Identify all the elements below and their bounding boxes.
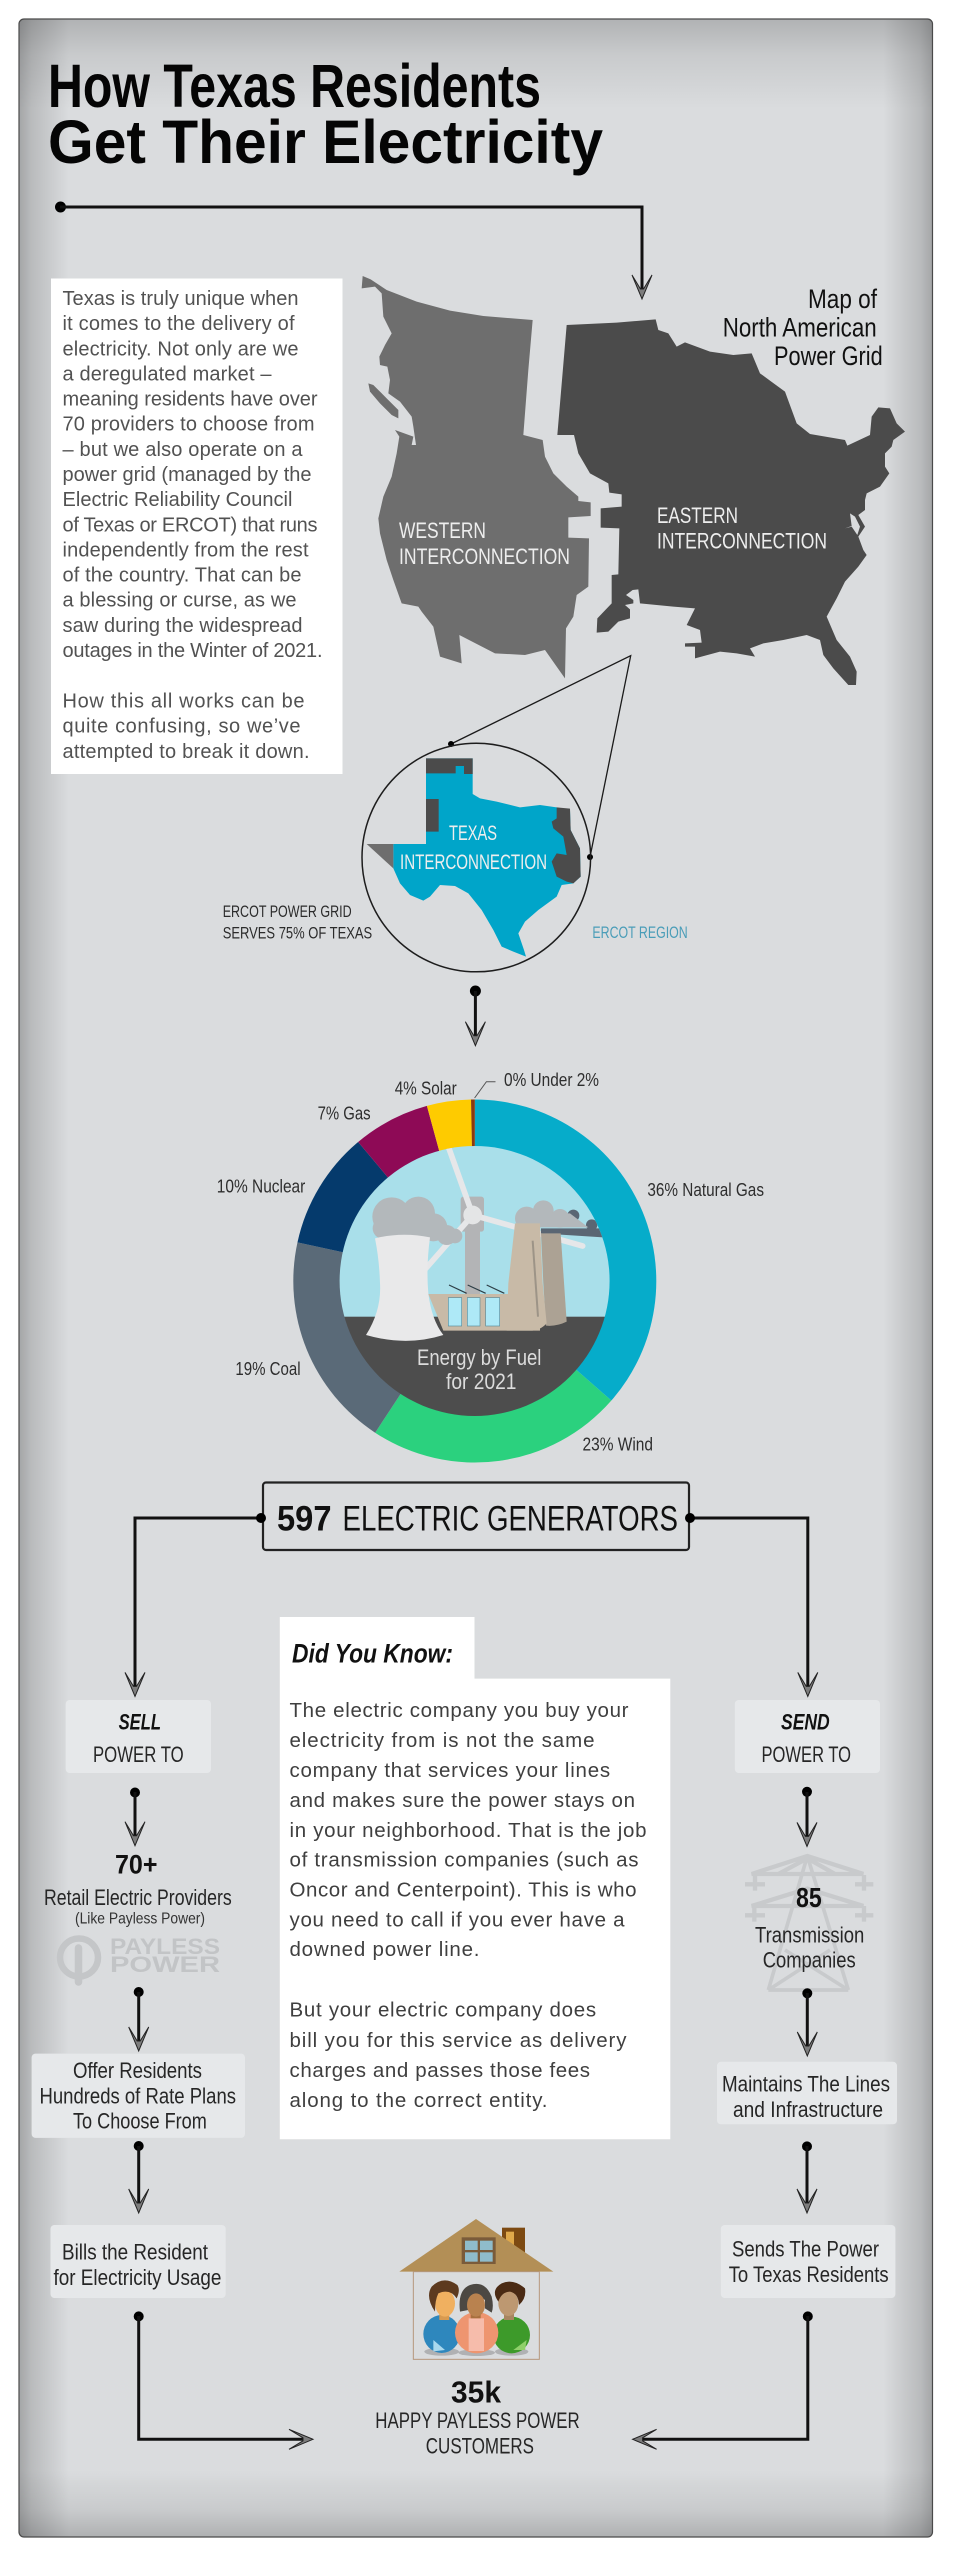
panel: intro text: How this all works can be xyxy=(62,690,304,712)
stat: 85 transmission companies: Companies xyxy=(763,1948,856,1973)
label: ERCOT power grid xyxy=(223,902,372,943)
box: bills the resident: Bills the Resident xyxy=(62,2240,208,2265)
panel: did you know: and makes sure the power stays on xyxy=(290,1789,635,1812)
panel: intro text: independently from the rest xyxy=(62,539,309,561)
icon: transmission tower xyxy=(745,1856,873,1990)
box: rate plans: Offer Residents xyxy=(73,2058,202,2083)
arrow: Texas to donut xyxy=(465,986,485,1046)
panel: did you know: along to the correct entity. xyxy=(290,2089,548,2112)
arrow: send to transmission xyxy=(797,1787,817,1846)
stat: 70+ retail electric providers: (Like Payless Power) xyxy=(75,1910,205,1927)
panel: intro text xyxy=(51,278,342,774)
slice: gas xyxy=(358,1106,475,1281)
panel: did you know: But your electric company does xyxy=(290,1998,596,2021)
map: western interconnection: WESTERN xyxy=(399,518,486,543)
panel: did you know: The electric company you buy your xyxy=(290,1699,629,1722)
map: Texas interconnection circle: TEXAS xyxy=(449,822,497,845)
map: western interconnection xyxy=(362,276,591,678)
donut labels: 10% Nuclear xyxy=(217,1176,305,1196)
box: maintains lines xyxy=(717,2062,897,2124)
panel: did you know: Did You Know: xyxy=(292,1638,453,1668)
logo: payless power: POWER xyxy=(110,1952,220,1977)
box: send power to: POWER TO xyxy=(762,1742,851,1767)
map: eastern interconnection xyxy=(557,319,905,685)
icon: house with family xyxy=(399,2219,553,2359)
box: sell power to: POWER TO xyxy=(93,1742,184,1767)
stat: 35k customers: CUSTOMERS xyxy=(426,2434,534,2459)
arrow: generators to sell xyxy=(125,1513,266,1696)
box: 597 electric generators: ELECTRIC GENERATORS xyxy=(342,1499,678,1538)
panel: did you know: bill you for this service as delivery xyxy=(290,2029,627,2052)
slice: wind xyxy=(375,1281,611,1462)
box: sell power to xyxy=(66,1700,211,1773)
zoom lines: map to Texas xyxy=(448,656,631,860)
map heading: Power Grid xyxy=(774,341,883,371)
box: sell power to: SELL xyxy=(119,1710,161,1735)
title: How Texas Residents xyxy=(48,52,541,120)
box: 597 electric generators: 597 xyxy=(277,1499,332,1538)
arrow: lines to sends xyxy=(797,2141,817,2213)
map heading: Map of xyxy=(808,284,877,314)
box: maintains lines: Maintains The Lines xyxy=(722,2071,890,2096)
map: western interconnection: INTERCONNECTION xyxy=(399,544,570,569)
panel: intro text: Electric Reliability Council xyxy=(62,489,292,511)
title xyxy=(48,52,603,176)
donut labels: 36% Natural Gas xyxy=(647,1180,764,1200)
stat: 70+ retail electric providers: 70+ xyxy=(115,1850,158,1880)
map heading xyxy=(723,284,883,371)
panel: intro text: it comes to the delivery of xyxy=(62,313,295,335)
label: ERCOT power grid: ERCOT POWER GRID xyxy=(223,902,352,921)
panel: did you know: charges and passes those fees xyxy=(290,2059,590,2082)
slice: solar xyxy=(427,1100,475,1281)
stat: 85 transmission companies: 85 xyxy=(796,1882,822,1913)
donut labels: 0% Under 2% xyxy=(504,1070,599,1090)
person: right xyxy=(493,2282,530,2353)
panel: intro text: – but we also operate on a xyxy=(62,439,303,461)
stat: 85 transmission companies xyxy=(755,1882,864,1973)
arrow: generators to send xyxy=(685,1513,818,1696)
map: eastern interconnection: EASTERN xyxy=(657,503,738,528)
donut center caption xyxy=(417,1345,541,1394)
panel: intro text: Texas is truly unique when xyxy=(62,288,298,310)
arrow: sell to retail providers xyxy=(125,1788,145,1846)
person: left xyxy=(423,2280,460,2353)
panel: did you know: electricity from is not the same xyxy=(290,1729,594,1752)
panel: intro text: 70 providers to choose from xyxy=(62,414,314,436)
donut labels xyxy=(217,1070,764,1455)
panel: intro text: a deregulated market – xyxy=(62,363,272,385)
slice: coal xyxy=(293,1242,475,1433)
panel: intro text: saw during the widespread xyxy=(62,615,302,637)
arrow: transmission to lines xyxy=(797,1988,817,2056)
donut labels: 4% Solar xyxy=(395,1079,457,1099)
donut chart: energy by fuel xyxy=(293,1100,656,1462)
label: ERCOT region: ERCOT REGION xyxy=(592,923,688,942)
panel: did you know xyxy=(280,1617,670,2139)
panel: intro text: of Texas or ERCOT) that runs xyxy=(62,514,318,536)
person: center xyxy=(455,2284,498,2353)
panel: intro text: a blessing or curse, as we xyxy=(62,590,296,612)
panel: intro text: electricity. Not only are we xyxy=(62,338,298,360)
box: sends the power: To Texas Residents xyxy=(729,2262,889,2287)
donut labels: 23% Wind xyxy=(582,1435,653,1455)
panel: intro text: power grid (managed by the xyxy=(62,464,312,486)
donut labels: 19% Coal xyxy=(235,1359,301,1379)
donut labels: 7% Gas xyxy=(318,1103,371,1123)
panel: did you know: of transmission companies (such as xyxy=(290,1849,638,1872)
box: bills the resident: for Electricity Usage xyxy=(54,2265,221,2290)
stat: 70+ retail electric providers xyxy=(44,1850,232,1927)
box: sends the power xyxy=(721,2225,895,2298)
box: 597 electric generators xyxy=(263,1482,689,1550)
arrow: title to map xyxy=(55,202,652,299)
box: rate plans xyxy=(32,2054,245,2138)
panel: intro text: attempted to break it down. xyxy=(62,741,310,763)
panel: did you know: downed power line. xyxy=(290,1938,480,1961)
box: sends the power: Sends The Power xyxy=(732,2236,879,2261)
box: maintains lines: and Infrastructure xyxy=(733,2097,883,2122)
panel: did you know: in your neighborhood. That is the job xyxy=(290,1819,646,1842)
panel: intro text: of the country. That can be xyxy=(62,564,302,586)
box: send power to: SEND xyxy=(781,1710,830,1735)
map: eastern interconnection: INTERCONNECTION xyxy=(657,529,827,554)
logo: payless power xyxy=(60,1934,220,1982)
panel: did you know: company that services your lines xyxy=(290,1759,610,1782)
box: send power to xyxy=(735,1700,880,1773)
stat: 70+ retail electric providers: Retail Electric Providers xyxy=(44,1885,232,1910)
center illustration: power plant scene xyxy=(339,1146,611,1417)
box: rate plans: Hundreds of Rate Plans xyxy=(40,2084,236,2109)
arrow: bills to customers xyxy=(134,2311,313,2449)
stat: 35k customers: 35k xyxy=(451,2374,502,2410)
arrow: providers to rate plans xyxy=(129,1987,149,2051)
stat: 85 transmission companies: Transmission xyxy=(755,1922,864,1947)
label: ERCOT power grid: SERVES 75% OF TEXAS xyxy=(223,924,372,943)
donut center caption: for 2021 xyxy=(446,1369,516,1394)
logo: payless power: PAYLESS xyxy=(110,1934,220,1959)
slice: nuclear xyxy=(297,1142,475,1281)
donut center caption: Energy by Fuel xyxy=(417,1345,541,1370)
arrow: sends to customers xyxy=(633,2311,813,2449)
panel: intro text: meaning residents have over xyxy=(62,389,318,411)
title: Get Their Electricity xyxy=(48,108,603,176)
panel: did you know: you need to call if you ever have a xyxy=(290,1908,625,1931)
map: Texas interconnection circle xyxy=(362,743,591,972)
map: Texas interconnection circle: INTERCONNECTION xyxy=(400,851,547,874)
panel: intro text: outages in the Winter of 2021. xyxy=(62,640,322,662)
stat: 35k customers: HAPPY PAYLESS POWER xyxy=(375,2408,580,2433)
stat: 35k customers xyxy=(375,2374,580,2459)
map heading: North American xyxy=(723,313,877,343)
arrow: rate plans to bills xyxy=(129,2141,149,2213)
panel: intro text: quite confusing, so we’ve xyxy=(62,716,300,738)
slice: under 2% xyxy=(471,1100,475,1281)
panel: did you know: Oncor and Centerpoint). This is who xyxy=(290,1878,636,1902)
box: rate plans: To Choose From xyxy=(73,2109,207,2134)
slice: natural gas xyxy=(475,1100,656,1401)
box: bills the resident xyxy=(50,2225,226,2298)
